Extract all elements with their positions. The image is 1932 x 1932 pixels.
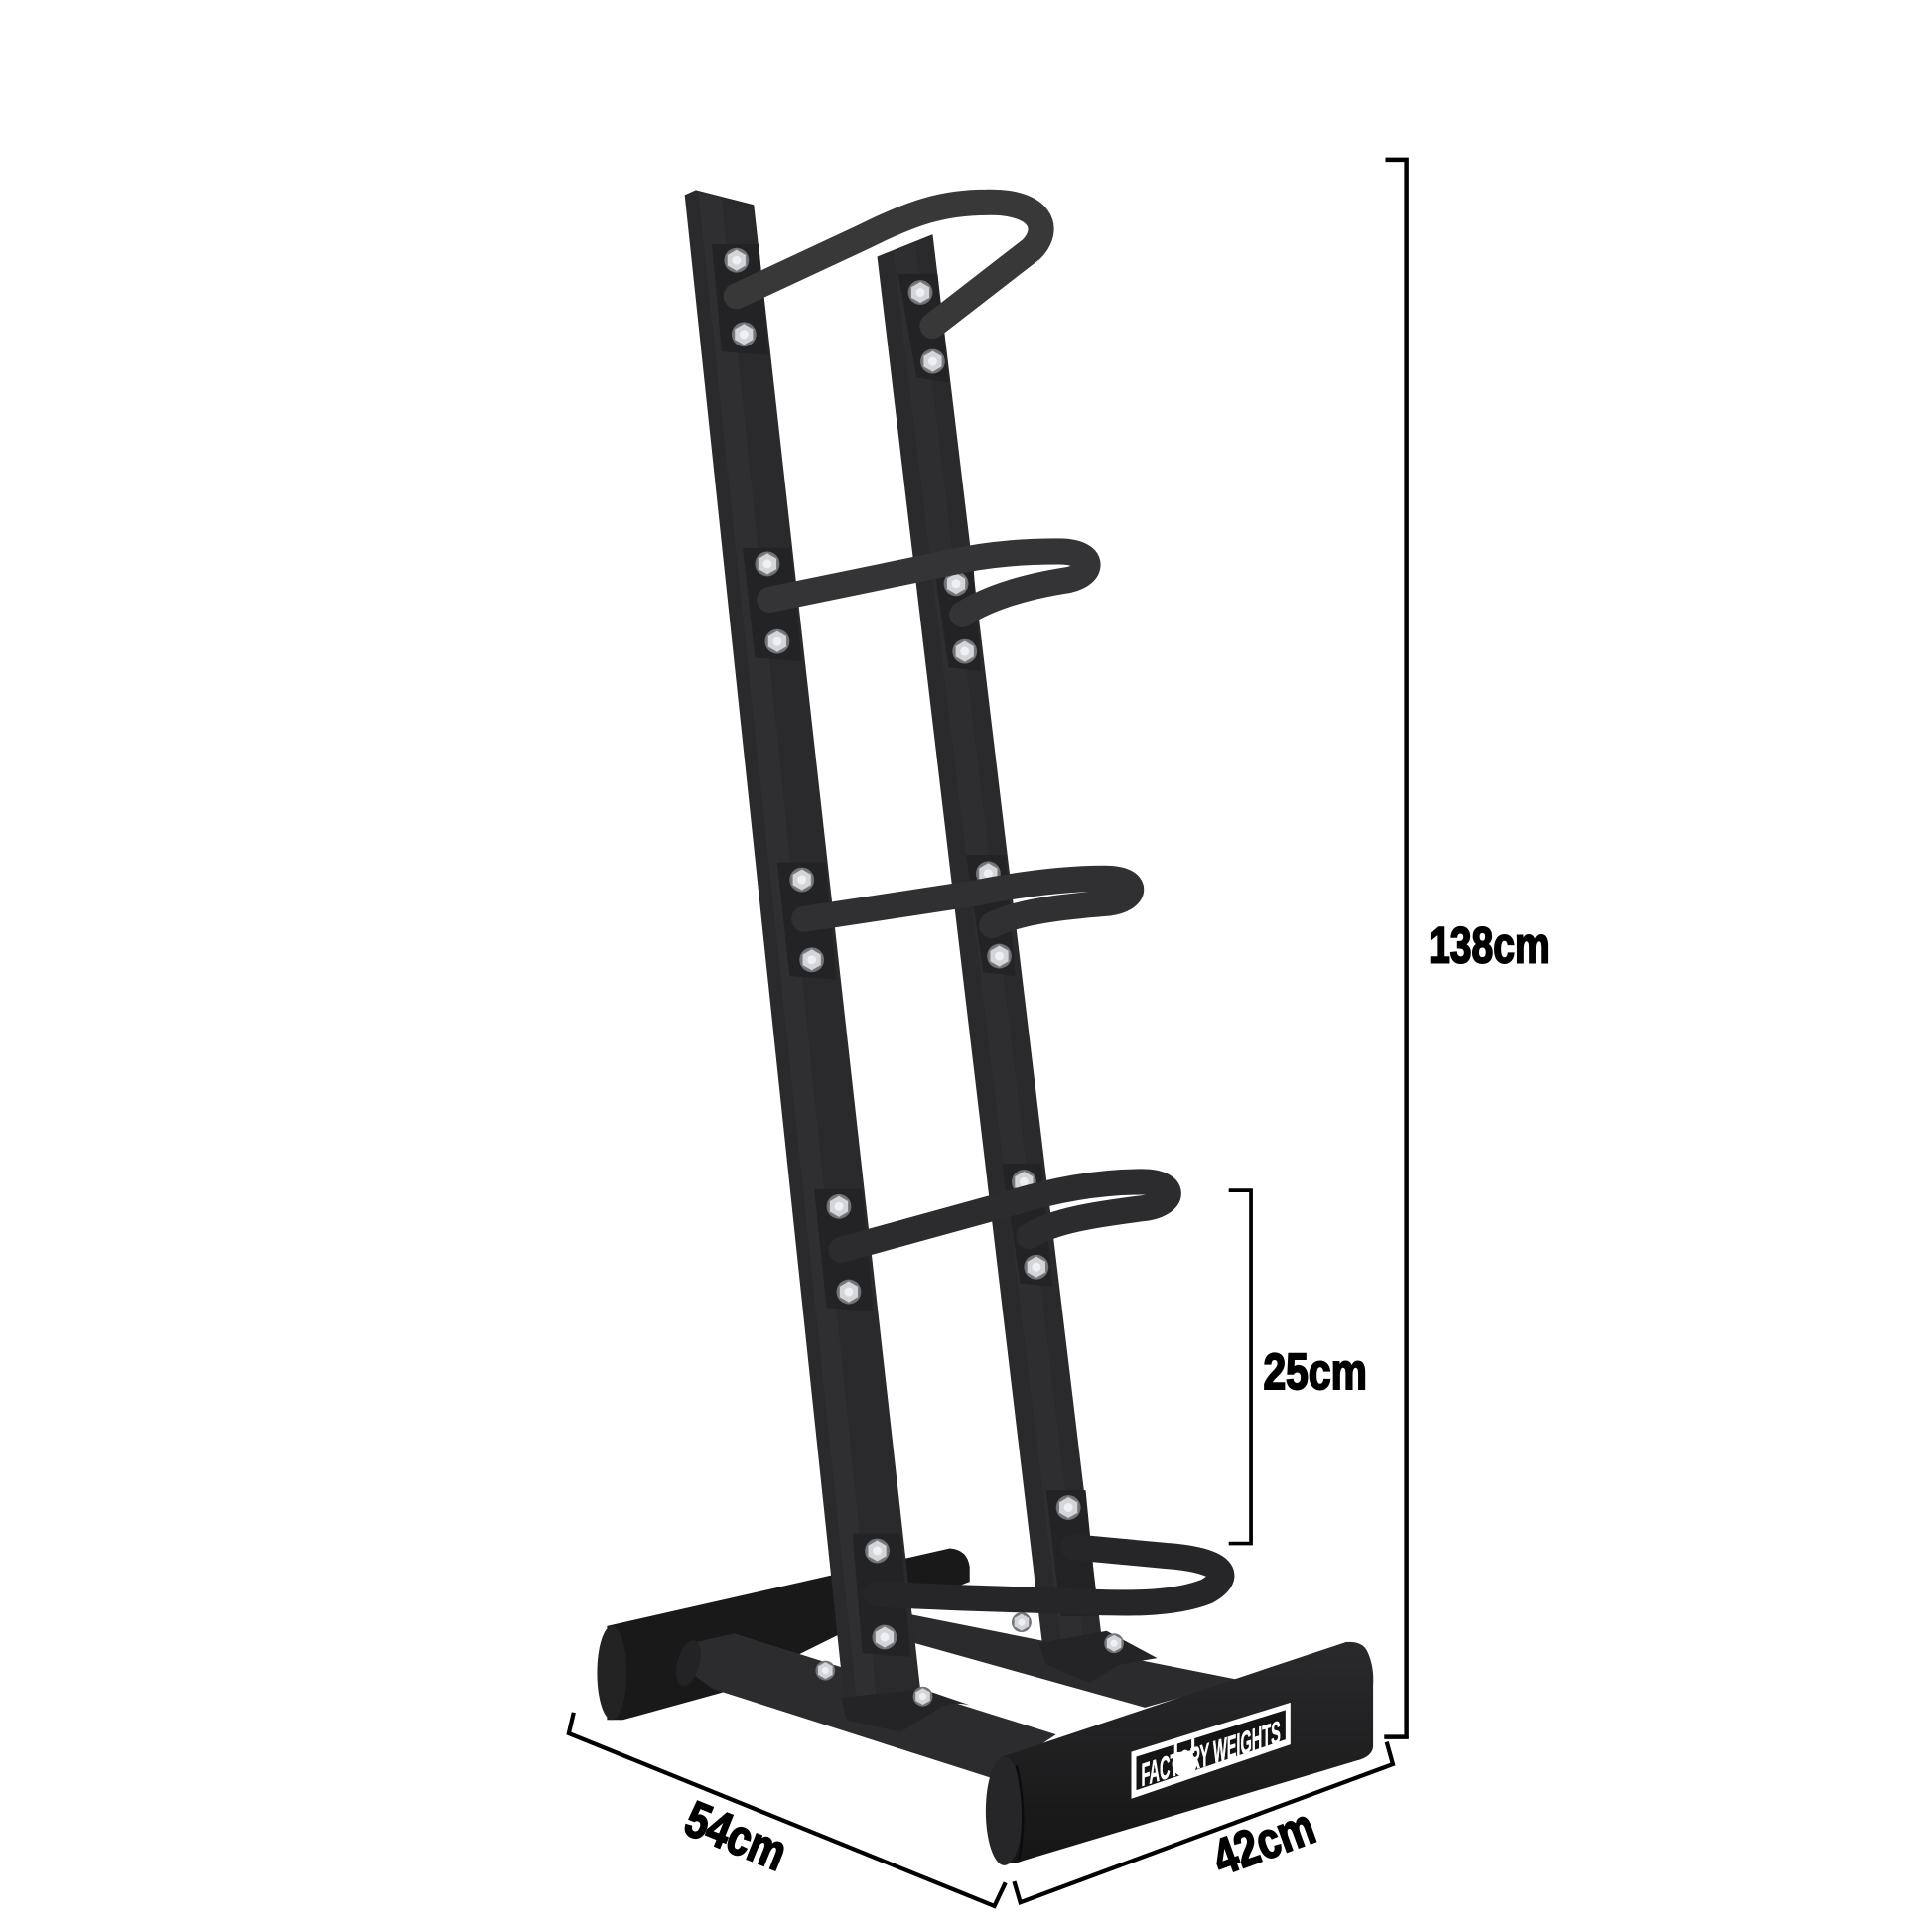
ring 5 (876, 1547, 1221, 1602)
front base bar with logo: FACTORY WEIGHTS (1141, 1715, 1281, 1794)
mounting plates (712, 244, 1098, 1657)
label: 138cm: 138cm (1429, 916, 1550, 973)
label: 42cm: 42cm (1205, 1797, 1322, 1886)
ring 4 (841, 1181, 1169, 1250)
height bracket: 138cm (1384, 160, 1407, 1737)
icon: kettlebell (1173, 1737, 1196, 1776)
ring 3 (804, 879, 1131, 925)
label: 25cm: 25cm (1263, 1343, 1367, 1400)
product: ball rack (597, 190, 1373, 1865)
width bracket: 42cm (1014, 1742, 1393, 1902)
ball holder rings (737, 203, 1221, 1602)
bolts (724, 248, 1081, 1649)
front base bar with logo (986, 1642, 1373, 1865)
ring 1 (737, 203, 1041, 326)
ring 2 (769, 551, 1088, 615)
left upright (685, 190, 970, 1732)
depth bracket: 54cm (569, 1713, 1006, 1906)
right base rail (906, 1613, 1241, 1708)
label: 54cm: 54cm (677, 1790, 795, 1881)
right upright (878, 234, 1158, 1683)
left base rail (671, 1633, 1056, 1778)
logo badge (1132, 1703, 1291, 1799)
spacing bracket: 25cm (1229, 1190, 1251, 1544)
rear base bar (597, 1549, 970, 1720)
